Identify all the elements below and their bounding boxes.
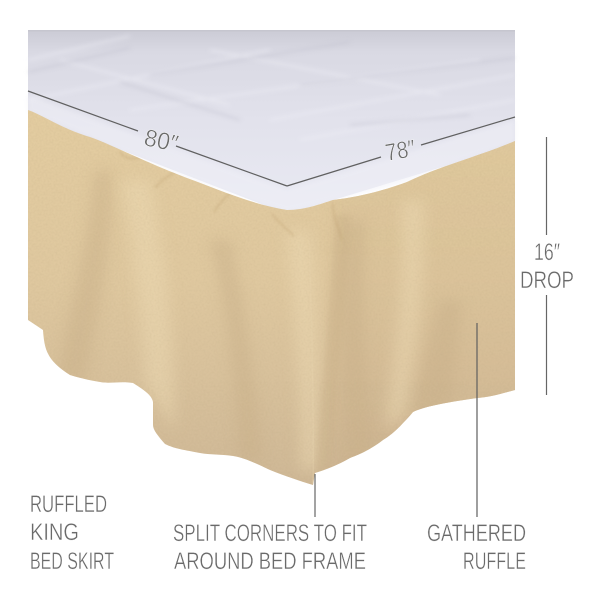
side panel shading <box>330 141 515 468</box>
dimension: 80 inch width <box>28 91 287 186</box>
callout: split corners: AROUND BED FRAME <box>174 548 366 575</box>
gathers <box>120 152 342 240</box>
title: ruffled king bed skirt <box>30 491 114 575</box>
corner seam <box>315 215 350 474</box>
dimension: 78 inch length <box>287 117 515 186</box>
callout: gathered ruffle <box>427 323 526 575</box>
dimension: 78 inch length: 78″ <box>383 135 418 167</box>
fabric grain <box>28 105 518 490</box>
title: ruffled king bed skirt: KING <box>30 519 79 546</box>
dimension: 80 inch width: 80″ <box>142 124 181 158</box>
callout: split corners <box>173 474 367 575</box>
title: ruffled king bed skirt: RUFFLED <box>30 491 107 518</box>
callout: gathered ruffle: RUFFLE <box>463 548 526 575</box>
callout: split corners: SPLIT CORNERS TO FIT <box>173 520 367 547</box>
dimension: 16 inch drop <box>520 137 574 395</box>
dimension: 16 inch drop: 16″ <box>534 239 560 266</box>
dimension: 16 inch drop: DROP <box>520 267 574 294</box>
photo: bed sheet top <box>28 30 515 214</box>
photo: burlap bed skirt <box>28 105 530 500</box>
callout: gathered ruffle: GATHERED <box>427 520 526 547</box>
title: ruffled king bed skirt: BED SKIRT <box>30 548 114 575</box>
